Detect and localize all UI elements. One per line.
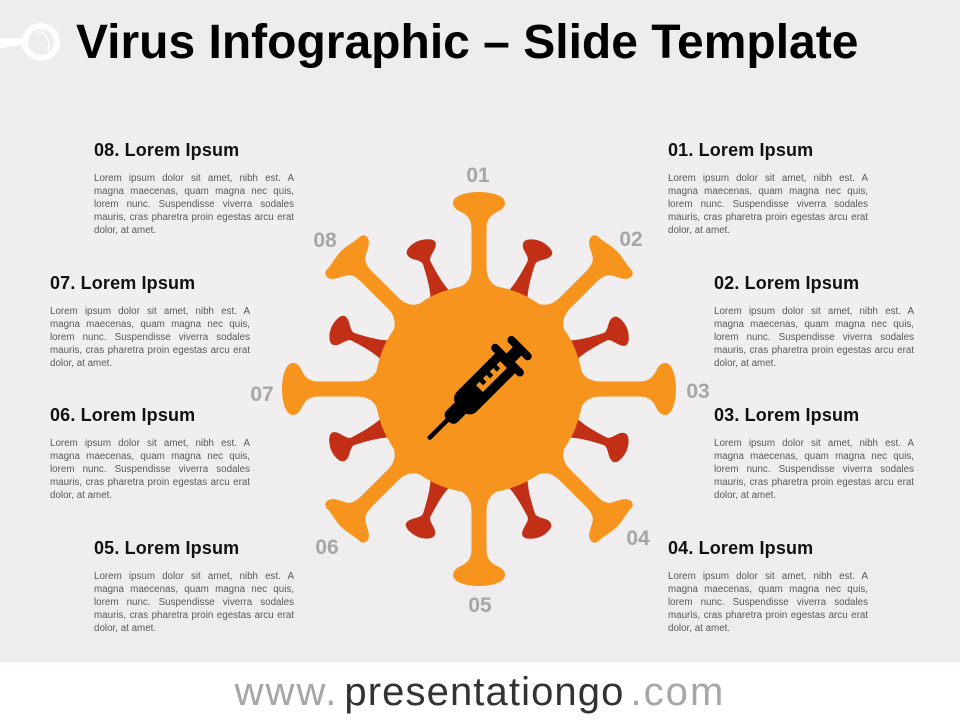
text block 01: mauris, cras pharetra proin egestas arcu erat <box>668 212 868 223</box>
text block 02: magna maecenas, quam magna nec quis, <box>714 319 914 330</box>
text block 08 <box>94 140 294 236</box>
text block 06: magna maecenas, quam magna nec quis, <box>50 451 250 462</box>
text block 02: 02. Lorem Ipsum <box>714 273 859 293</box>
number labels: 03 <box>686 380 710 403</box>
number labels: 07 <box>250 383 274 406</box>
text block 03: magna maecenas, quam magna nec quis, <box>714 451 914 462</box>
text block 03: Lorem ipsum dolor sit amet, nibh est. A <box>714 438 914 449</box>
number labels: 08 <box>313 229 337 252</box>
icon: white ring logo <box>0 23 60 61</box>
number labels: 05 <box>468 594 492 617</box>
text block 06: Lorem ipsum dolor sit amet, nibh est. A <box>50 438 250 449</box>
text block 05: magna maecenas, quam magna nec quis, <box>94 584 294 595</box>
text block 04: dolor, at amet. <box>668 623 730 634</box>
text block 01 <box>668 140 868 236</box>
text block 08: 08. Lorem Ipsum <box>94 140 239 160</box>
text block 02: dolor, at amet. <box>714 358 776 369</box>
text block 01: Lorem ipsum dolor sit amet, nibh est. A <box>668 173 868 184</box>
text block 04: lorem nunc. Suspendisse viverra sodales <box>668 597 868 608</box>
text block 04 <box>668 538 868 634</box>
text block 07 <box>50 273 250 369</box>
text block 05: 05. Lorem Ipsum <box>94 538 239 558</box>
text block 05: dolor, at amet. <box>94 623 156 634</box>
text block 08: Lorem ipsum dolor sit amet, nibh est. A <box>94 173 294 184</box>
text block 06 <box>50 405 250 501</box>
text block 01: 01. Lorem Ipsum <box>668 140 813 160</box>
text block 04: 04. Lorem Ipsum <box>668 538 813 558</box>
text block 02: lorem nunc. Suspendisse viverra sodales <box>714 332 914 343</box>
text block 03: 03. Lorem Ipsum <box>714 405 859 425</box>
text block 01: dolor, at amet. <box>668 225 730 236</box>
text block 04: mauris, cras pharetra proin egestas arcu erat <box>668 610 868 621</box>
text block 03: dolor, at amet. <box>714 490 776 501</box>
text block 03: mauris, cras pharetra proin egestas arcu erat <box>714 477 914 488</box>
text block 08: magna maecenas, quam magna nec quis, <box>94 186 294 197</box>
text block 01: magna maecenas, quam magna nec quis, <box>668 186 868 197</box>
text block 07: Lorem ipsum dolor sit amet, nibh est. A <box>50 306 250 317</box>
text block 07: 07. Lorem Ipsum <box>50 273 195 293</box>
text block 07: lorem nunc. Suspendisse viverra sodales <box>50 332 250 343</box>
footer website: www.presentationgo.com <box>235 670 725 714</box>
number labels: 06 <box>315 536 339 559</box>
title: Virus Infographic – Slide Template <box>76 16 858 69</box>
text block 05: lorem nunc. Suspendisse viverra sodales <box>94 597 294 608</box>
text block 06: dolor, at amet. <box>50 490 112 501</box>
text block 08: lorem nunc. Suspendisse viverra sodales <box>94 199 294 210</box>
text block 02: Lorem ipsum dolor sit amet, nibh est. A <box>714 306 914 317</box>
number labels: 04 <box>626 527 650 550</box>
text block 04: magna maecenas, quam magna nec quis, <box>668 584 868 595</box>
text block 05: Lorem ipsum dolor sit amet, nibh est. A <box>94 571 294 582</box>
text block 03: lorem nunc. Suspendisse viverra sodales <box>714 464 914 475</box>
text block 06: 06. Lorem Ipsum <box>50 405 195 425</box>
orange virus body with long spikes <box>282 192 676 586</box>
short red spikes <box>325 235 633 543</box>
text block 05: mauris, cras pharetra proin egestas arcu erat <box>94 610 294 621</box>
number labels: 02 <box>619 228 643 251</box>
text block 07: mauris, cras pharetra proin egestas arcu erat <box>50 345 250 356</box>
text block 07: magna maecenas, quam magna nec quis, <box>50 319 250 330</box>
text block 04: Lorem ipsum dolor sit amet, nibh est. A <box>668 571 868 582</box>
text block 05 <box>94 538 294 634</box>
text block 08: dolor, at amet. <box>94 225 156 236</box>
text block 03 <box>714 405 914 501</box>
text block 06: mauris, cras pharetra proin egestas arcu erat <box>50 477 250 488</box>
icon: syringe <box>413 330 538 455</box>
text block 02 <box>714 273 914 369</box>
text block 02: mauris, cras pharetra proin egestas arcu erat <box>714 345 914 356</box>
number labels <box>250 164 710 617</box>
footer website <box>0 662 960 720</box>
text block 07: dolor, at amet. <box>50 358 112 369</box>
text block 06: lorem nunc. Suspendisse viverra sodales <box>50 464 250 475</box>
text block 08: mauris, cras pharetra proin egestas arcu erat <box>94 212 294 223</box>
text block 01: lorem nunc. Suspendisse viverra sodales <box>668 199 868 210</box>
number labels: 01 <box>466 164 490 187</box>
